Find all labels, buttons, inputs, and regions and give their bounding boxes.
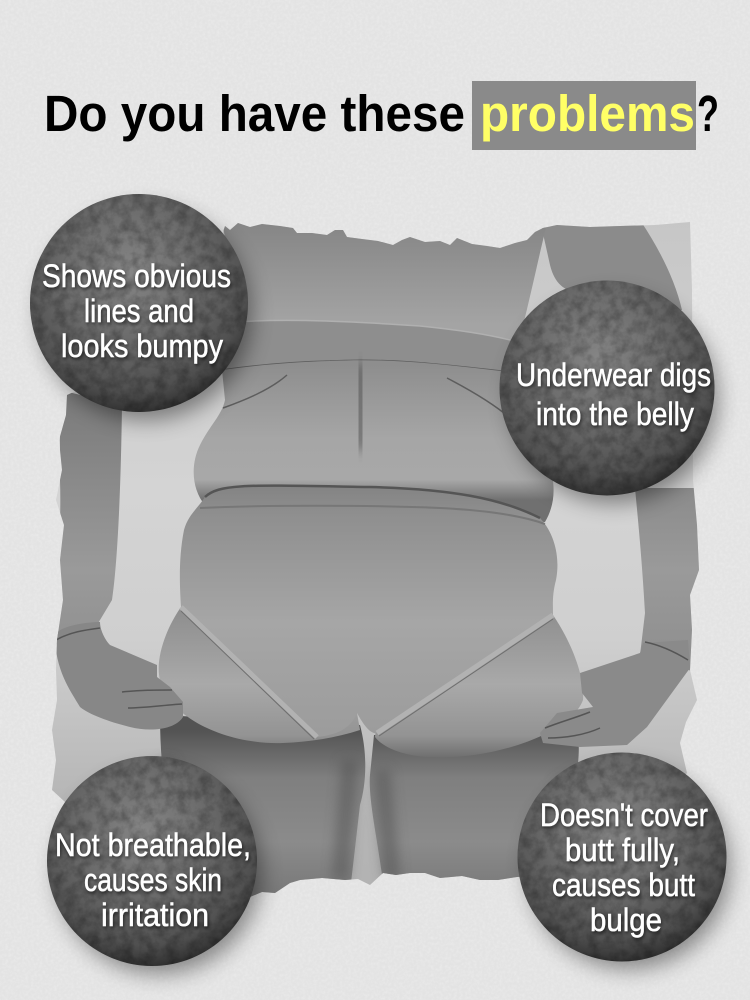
elastic band [222, 320, 510, 372]
callout: butt coverage: bulge [590, 902, 662, 938]
right hand [540, 652, 688, 747]
right cheek [375, 615, 583, 757]
left hand [55, 622, 183, 730]
left arm [55, 390, 122, 645]
callout: not breathable: irritation [101, 897, 209, 933]
callout: butt coverage: butt fully, [565, 832, 680, 868]
callout: digs into belly [500, 280, 714, 496]
lower back [194, 360, 554, 522]
right upper arm [540, 220, 682, 310]
ball [30, 194, 248, 412]
leg openings [181, 607, 553, 737]
highlight box [472, 81, 696, 150]
callout: lines and bumpy: looks bumpy [61, 328, 223, 364]
callout: lines and bumpy: lines and [84, 293, 194, 329]
panel background [40, 215, 710, 905]
callout: not breathable: causes skin [84, 862, 222, 898]
title [44, 81, 719, 150]
title: Do you have these [44, 85, 465, 142]
callout: butt coverage: Doesn't cover [540, 797, 708, 833]
right leg [370, 735, 579, 890]
spine shadow [359, 364, 361, 450]
callout: lines and bumpy: Shows obvious [42, 258, 231, 294]
photo panel [40, 215, 710, 905]
left cheek [159, 607, 360, 743]
upper back top [224, 223, 546, 342]
left leg [160, 715, 365, 900]
waistband lines [205, 486, 540, 518]
leg inner shading [161, 756, 402, 880]
circle shadows [40, 208, 730, 974]
callout: butt coverage [518, 752, 726, 962]
callout: lines and bumpy [30, 194, 248, 412]
title: problems [480, 85, 695, 142]
right arm [635, 488, 702, 672]
callout: digs into belly: Underwear digs [516, 357, 711, 393]
ball [518, 752, 726, 962]
callout: digs into belly: into the belly [536, 396, 694, 432]
callout: butt coverage: causes butt [552, 867, 695, 903]
love handle creases [222, 374, 502, 413]
title: ? [697, 85, 719, 142]
underwear [180, 486, 557, 737]
ball [500, 280, 714, 496]
callout: not breathable: Not breathable, [55, 827, 251, 863]
callout: not breathable [47, 756, 257, 966]
ball [47, 756, 257, 966]
